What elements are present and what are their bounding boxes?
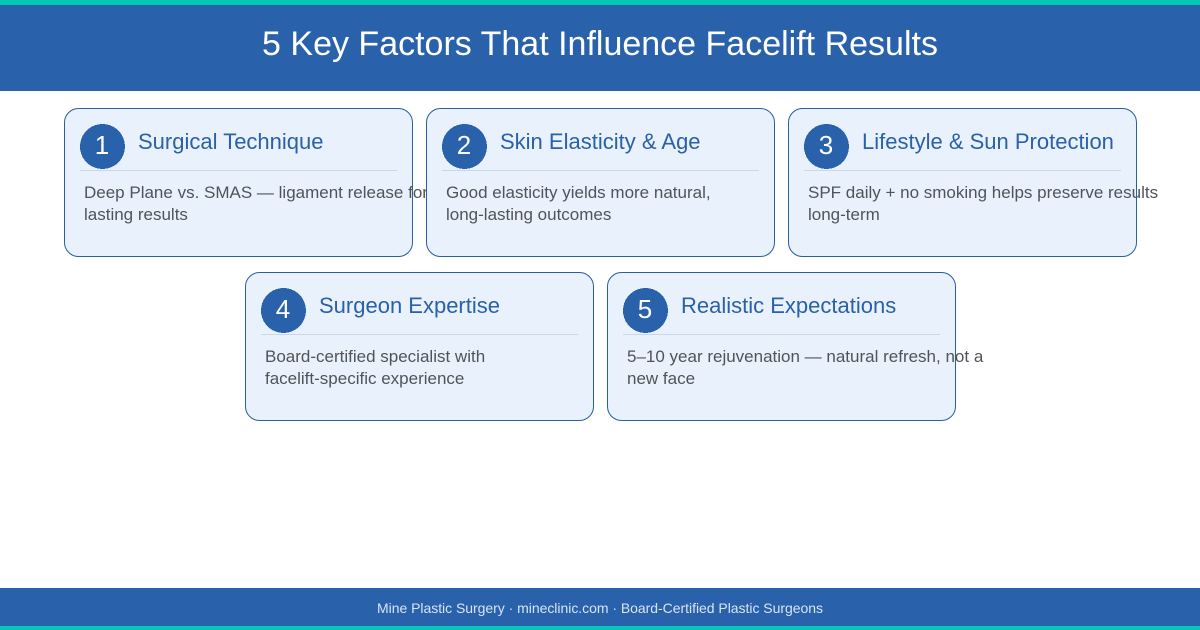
panel: factor 5 realistic expectations: new face (627, 369, 695, 388)
panel: factor 4 surgeon expertise (246, 272, 594, 420)
panel: factor 4 surgeon expertise: facelift-specific experience (265, 369, 464, 388)
panel: factor 4 surgeon expertise: Board-certified specialist with (265, 347, 485, 366)
panel: factor 1 surgical technique: lasting results (84, 205, 188, 224)
footer band (0, 588, 1200, 630)
panel: factor 5 realistic expectations (608, 272, 984, 420)
panel: factor 5 realistic expectations: Realistic Expectations (681, 293, 896, 318)
panel: factor 2 skin elasticity: Skin Elasticity & Age (500, 129, 701, 154)
panel: factor 3 lifestyle: long-term (808, 205, 880, 224)
panel: factor 1 surgical technique: 1 (95, 130, 109, 160)
panel: factor 3 lifestyle (788, 108, 1158, 256)
panel: factor 3 lifestyle: SPF daily + no smoking helps preserve results (808, 183, 1158, 202)
panel: factor 5 realistic expectations: 5–10 year rejuvenation — natural refresh, not a (627, 347, 984, 366)
panel: factor 3 lifestyle: Lifestyle & Sun Protection (862, 129, 1114, 154)
panel: factor 4 surgeon expertise: Surgeon Expertise (319, 293, 500, 318)
panel: factor 1 surgical technique (64, 108, 428, 256)
panel: factor 2 skin elasticity (426, 108, 774, 256)
panel: factor 5 realistic expectations: 5 (638, 294, 652, 324)
title: 5 Key Factors That Influence Facelift Results (262, 25, 938, 63)
panel: factor 2 skin elasticity: long-lasting outcomes (446, 205, 611, 224)
panel: factor 1 surgical technique: Surgical Technique (138, 129, 324, 154)
header band (0, 0, 1200, 91)
footer text: Mine Plastic Surgery · mineclinic.com · Board-Certified Plastic Surgeons (377, 600, 823, 616)
panel: factor 3 lifestyle: 3 (819, 130, 833, 160)
panel: factor 4 surgeon expertise: 4 (276, 294, 290, 324)
panel: factor 1 surgical technique: Deep Plane vs. SMAS — ligament release for (84, 183, 428, 202)
panel: factor 2 skin elasticity: 2 (457, 130, 471, 160)
panel: factor 2 skin elasticity: Good elasticity yields more natural, (446, 183, 711, 202)
